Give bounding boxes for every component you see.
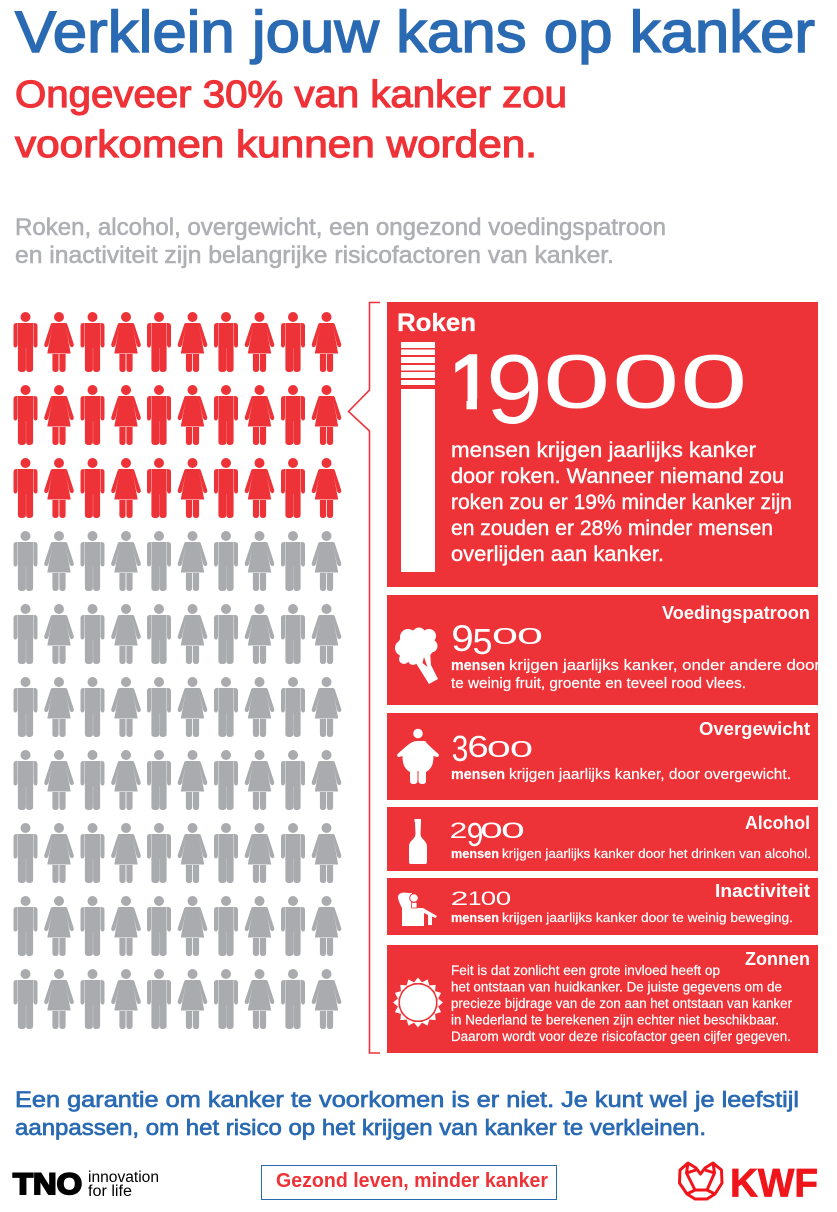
- panel: Zonnen: [387, 945, 818, 1053]
- text: Roken body: roken zou er 19% minder kanker zijn: [451, 491, 792, 514]
- text: Zonnen body: precieze bijdrage van de zon aan het ontstaan van kanker: [451, 996, 792, 1011]
- text: Roken body: en zouden er 28% minder mensen: [451, 517, 773, 540]
- icon: armchair: [398, 893, 437, 926]
- number: 3600: 0: [510, 736, 533, 762]
- logo: TNO: for life: [88, 1183, 132, 1200]
- panel: Roken: [387, 302, 818, 587]
- title: Verklein jouw kans op kanker: [15, 0, 815, 65]
- panel: Voedingspatroon: [387, 595, 820, 705]
- number: 2100: 0: [496, 889, 511, 910]
- number: 2900: 9: [467, 816, 483, 853]
- panel: Inactiviteit: [387, 878, 818, 935]
- number: 19000: 0: [612, 340, 680, 425]
- text: Overgewicht body: mensen: [451, 767, 505, 783]
- grey people: [14, 531, 341, 1029]
- number: 9500: 5: [472, 621, 492, 662]
- text: Zonnen body: Feit is dat zonlicht een grote invloed heeft op: [451, 963, 720, 978]
- closing statement: Een garantie om kanker te voorkomen is er niet. Je kunt wel je leefstijl: [15, 1087, 799, 1112]
- panel: Alcohol: [387, 807, 818, 871]
- text: Voedingspatroon body: krijgen jaarlijks kanker, onder andere door: [509, 658, 820, 674]
- subtitle: [15, 74, 567, 166]
- text: Roken body: door roken. Wanneer niemand zou: [451, 465, 784, 488]
- number: 9500: 0: [517, 623, 543, 649]
- intro text: Roken, alcohol, overgewicht, een ongezond voedingspatroon: [15, 214, 666, 241]
- heading: Overgewicht: Overgewicht: [699, 719, 810, 739]
- number: 2900: [450, 816, 525, 853]
- pictogram: 100 people, 30 red: [14, 312, 341, 1029]
- text: Roken body: overlijden aan kanker.: [451, 543, 664, 566]
- icon: broccoli: [393, 624, 439, 684]
- text: Zonnen body: het ontstaan van huidkanker. De juiste gegevens om de: [451, 980, 782, 994]
- text: Inactiviteit body: mensen: [451, 910, 499, 925]
- icon: cigarette bar: [401, 342, 435, 572]
- text: Alcohol body: mensen: [451, 846, 499, 861]
- closing statement: [15, 1087, 799, 1140]
- number: 2900: 0: [501, 818, 525, 843]
- number: 2100: 1: [468, 889, 482, 910]
- text: Zonnen body: [451, 963, 792, 1044]
- text: Zonnen body: in Nederland te berekenen zijn echter niet beschikbaar.: [451, 1012, 779, 1028]
- logo: TNO: innovation: [88, 1169, 159, 1186]
- number: 2900: 2: [450, 818, 467, 843]
- number: 19000: 9: [486, 334, 543, 444]
- icon: sun: [393, 978, 443, 1028]
- text: Overgewicht body: krijgen jaarlijks kanker, door overgewicht.: [509, 767, 791, 783]
- closing statement: aanpassen, om het risico op het krijgen van kanker te verkleinen.: [15, 1115, 706, 1140]
- slogan box: Gezond leven, minder kanker: [276, 1170, 548, 1192]
- number: 2100: 0: [481, 889, 496, 910]
- number: 3600: 0: [487, 736, 511, 762]
- logo: KWF: KWF: [730, 1162, 818, 1206]
- intro text: en inactiviteit zijn belangrijke risicofactoren van kanker.: [15, 242, 614, 269]
- heading: Roken: Roken: [397, 309, 476, 337]
- number: 2100: [451, 889, 511, 910]
- icon: overweight person: [397, 729, 439, 784]
- heading: Zonnen: Zonnen: [745, 949, 810, 969]
- subtitle: voorkomen kunnen worden.: [15, 124, 537, 166]
- number: 2100: 2: [451, 889, 468, 910]
- text: Voedingspatroon body: mensen: [451, 658, 505, 674]
- number: 19000: [448, 334, 748, 444]
- text: Voedingspatroon body: [451, 658, 820, 692]
- number: 19000: 0: [680, 340, 748, 425]
- red people: [14, 312, 341, 518]
- number: 9500: 0: [492, 623, 518, 649]
- logo: TNO: TNO: [13, 1168, 82, 1201]
- number: 3600: [452, 728, 533, 769]
- heading: Inactiviteit: Inactiviteit: [715, 881, 810, 901]
- number: 3600: 3: [452, 728, 468, 769]
- text: Voedingspatroon body: te weinig fruit, groente en teveel rood vlees.: [451, 676, 746, 692]
- number: 9500: [451, 618, 543, 662]
- number: 2900: 0: [480, 818, 503, 843]
- text: Roken body: [451, 439, 792, 566]
- heading: Voedingspatroon: Voedingspatroon: [662, 603, 810, 623]
- text: Inactiviteit body: krijgen jaarlijks kanker door te weinig beweging.: [502, 910, 793, 925]
- intro text: [15, 214, 666, 269]
- heading: Alcohol: Alcohol: [745, 813, 810, 833]
- number: 19000: 0: [543, 340, 610, 425]
- logo: TNO: [13, 1168, 159, 1201]
- slogan box: [262, 1166, 556, 1200]
- icon: KWF lion: [680, 1163, 722, 1199]
- bracket: [348, 302, 380, 1053]
- text: Zonnen body: Daarom wordt voor deze risicofactor geen cijfer gegeven.: [451, 1029, 791, 1044]
- number: 3600: 6: [467, 729, 489, 764]
- text: Roken body: mensen krijgen jaarlijks kanker: [451, 439, 756, 462]
- number: 19000: 1: [449, 340, 493, 425]
- logo: KWF: [680, 1162, 818, 1206]
- subtitle: Ongeveer 30% van kanker zou: [15, 74, 567, 116]
- number: 9500: 9: [451, 618, 474, 659]
- panel: Overgewicht: [387, 713, 818, 800]
- icon: bottle: [409, 819, 427, 864]
- text: Alcohol body: krijgen jaarlijks kanker door het drinken van alcohol.: [502, 846, 811, 861]
